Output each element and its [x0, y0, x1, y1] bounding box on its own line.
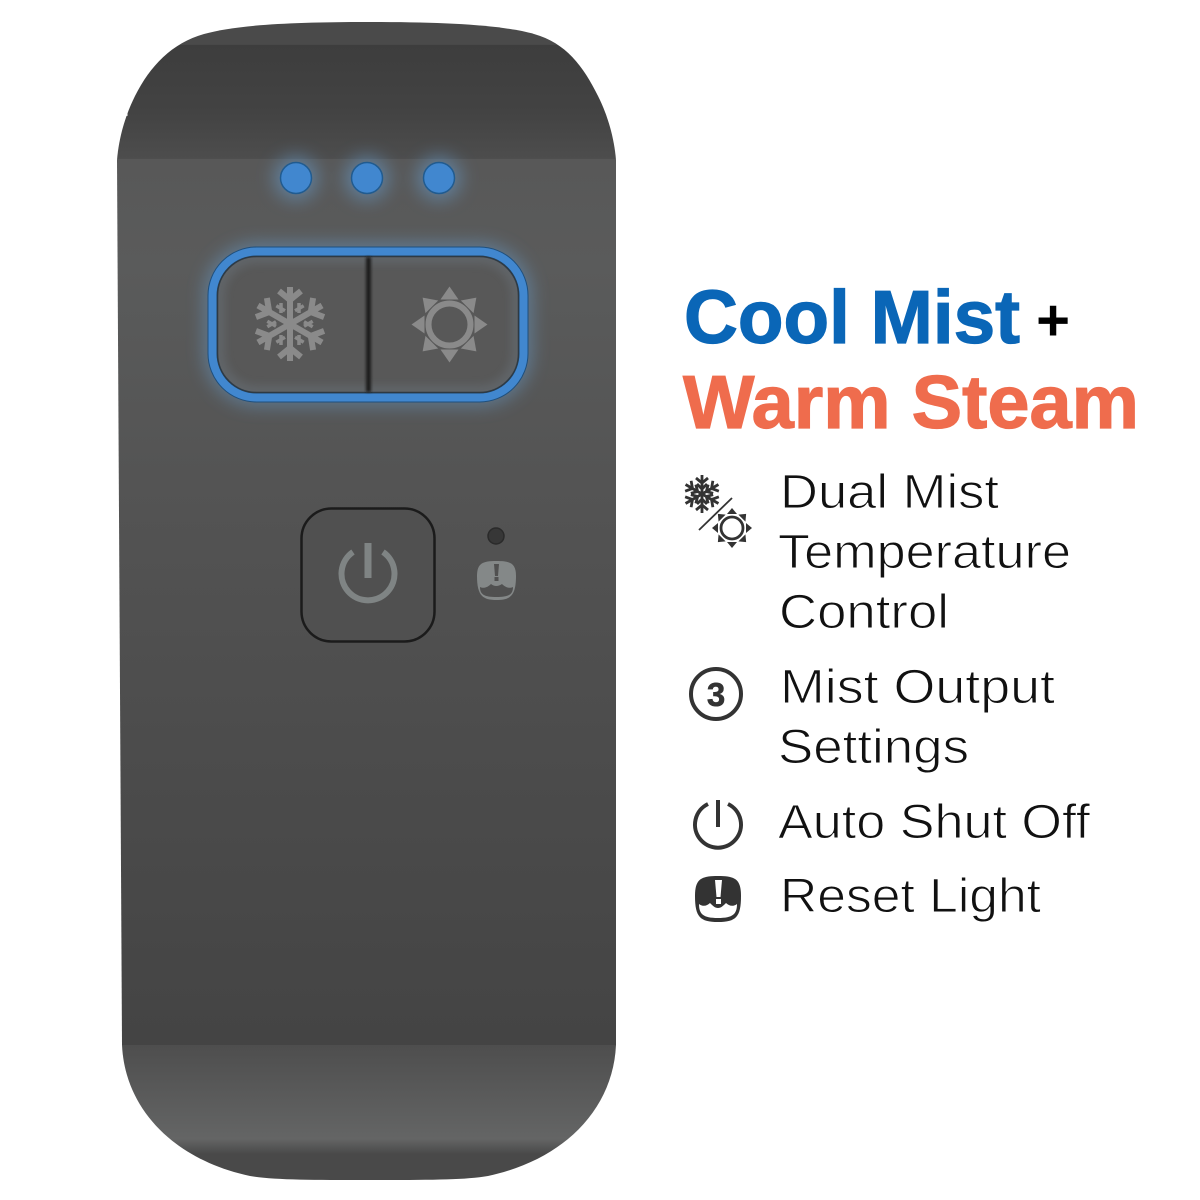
icon: reset light on device: [477, 561, 516, 600]
heading: cool mist plus warm steam: Cool Mist: [684, 275, 1020, 359]
icon: power symbol: [695, 800, 741, 848]
heading: cool mist plus warm steam: [683, 275, 1139, 444]
feature: mist output settings: [691, 661, 1055, 774]
feature: dual mist temperature control: Control: [779, 586, 949, 639]
indicator lights: [274, 156, 461, 200]
icon: snowflake slash sun: [683, 475, 752, 548]
feature: dual mist temperature control: Dual Mist: [780, 466, 999, 519]
icon: number three in circle: [691, 669, 741, 719]
plus sign: +: [1036, 288, 1070, 353]
icon: sun: [412, 286, 488, 362]
heading: cool mist plus warm steam: Warm Steam: [683, 360, 1139, 444]
device: control panel body: [117, 22, 616, 1180]
reset indicator light: [488, 528, 504, 544]
mist temperature button with blue ring: [212, 252, 524, 398]
feature: mist output settings: Settings: [778, 721, 969, 774]
icon: power symbol on button: [342, 543, 394, 600]
icon: reset light: [695, 876, 741, 922]
feature: reset light: Reset Light: [780, 870, 1041, 923]
icon: number three in circle: 3: [707, 676, 725, 713]
feature: auto shut off: Auto Shut Off: [778, 796, 1091, 849]
power button: [302, 508, 434, 642]
feature: mist output settings: Mist Output: [780, 661, 1055, 714]
feature: dual mist temperature control: Temperature: [778, 526, 1071, 579]
icon: snowflake: [252, 287, 328, 361]
feature: dual mist temperature control: [683, 466, 1071, 639]
